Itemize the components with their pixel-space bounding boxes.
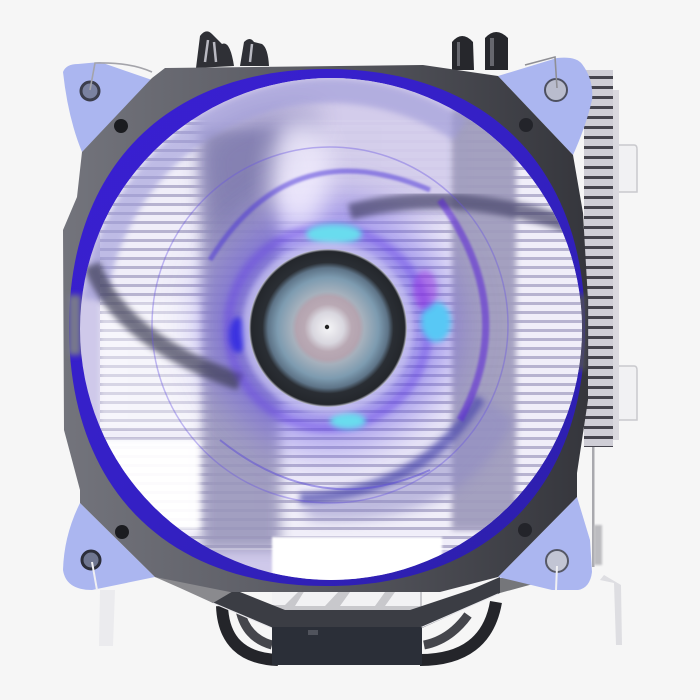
white lower-left glare (92, 440, 200, 530)
white upper glare (270, 120, 330, 230)
cyan LED spots (306, 224, 362, 244)
dark blade left (92, 265, 240, 382)
corner pad top-right (498, 58, 592, 155)
bright left fin patch (100, 300, 200, 430)
central purple glow (205, 200, 455, 450)
illustration: CPU cooler with blue LED fan (63, 31, 638, 666)
halo around hub (228, 228, 428, 428)
blue LED ring (69, 69, 585, 586)
corner pad bottom-right (498, 497, 592, 590)
cross bracket and heat spreader (155, 577, 555, 665)
base heat pipes (222, 602, 496, 660)
upper translucent blade wash (200, 70, 460, 220)
upper left dark blade (200, 108, 320, 250)
rim wash (95, 91, 460, 300)
mounting holes (114, 118, 533, 539)
heat pipes top (196, 31, 508, 70)
side fin stack (584, 70, 637, 567)
fin stack (100, 120, 590, 550)
lower blade wash (300, 395, 515, 521)
fan frame (63, 65, 588, 592)
pad screws and wire clips (81, 57, 568, 590)
dark blade right (350, 201, 570, 225)
corner pad bottom-left (63, 503, 155, 590)
corner pad top-left (63, 62, 152, 152)
lower dark blade (300, 398, 480, 498)
blue arcs (210, 171, 430, 260)
fan hub (242, 242, 414, 414)
ring fade left (68, 295, 81, 355)
right grey column (452, 110, 516, 530)
left grey column (202, 130, 280, 550)
mounting clips (99, 575, 622, 646)
fan interior with fins and blades (70, 70, 590, 590)
ring fade right (577, 295, 586, 370)
white lower glare (272, 537, 442, 582)
